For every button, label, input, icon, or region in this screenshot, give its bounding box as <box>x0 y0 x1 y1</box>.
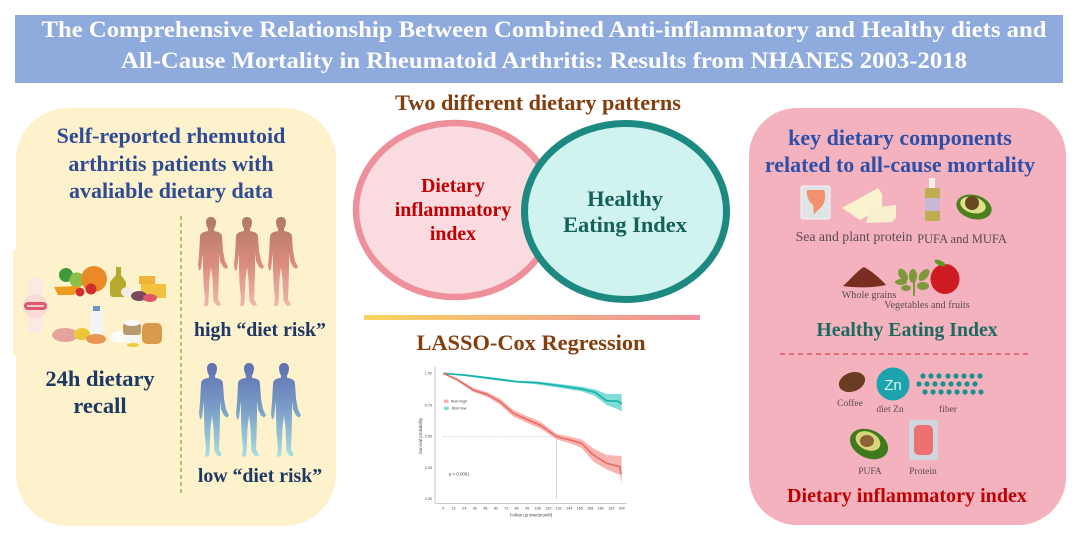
heading: LASSO-Cox Regression: LASSO-Cox Regression <box>416 330 646 355</box>
label: low diet risk: low “diet risk” <box>198 465 322 487</box>
chart: survival curves: 0.00 <box>425 497 432 501</box>
chart: survival curves: 96 <box>525 507 529 511</box>
chart: survival curves: 72 <box>504 507 508 511</box>
circle: healthy eating index <box>524 124 726 300</box>
panel heading: patients: Self-reported rhemutoid <box>57 123 285 148</box>
label: vegetables and fruits: Vegetables and fruits <box>884 300 970 311</box>
icon: oil bottle <box>925 178 940 221</box>
panel heading: key components <box>765 125 1035 177</box>
chart: survival curves: 192 <box>608 507 614 511</box>
label: 24h dietary recall: recall <box>73 393 127 418</box>
panel heading: patients: avaliable dietary data <box>69 178 273 203</box>
icon: meat, dairy and bread <box>52 306 162 347</box>
chart: survival curves: 204 <box>619 507 625 511</box>
label: 24h dietary recall: 24h dietary <box>45 366 155 391</box>
chart: survival curves: 168 <box>587 507 593 511</box>
label: PUFA and MUFA: PUFA and MUFA <box>917 232 1007 246</box>
circle: healthy eating index: Healthy <box>587 186 663 211</box>
chart: survival curves: 120 <box>545 507 551 511</box>
title banner: The Comprehensive Relationship Between Combined Anti-inflammatory and Healthy diets and <box>42 17 1046 43</box>
heading: dietary inflammatory index: Dietary inflammatory index <box>787 485 1027 507</box>
circle: dietary inflammatory index: Dietary <box>421 175 485 197</box>
icon: protein pack <box>909 420 938 460</box>
circle: healthy eating index: Eating Index <box>563 212 688 237</box>
label: fiber: fiber <box>939 404 958 415</box>
icon: tofu <box>842 188 896 223</box>
chart: survival curves: 12 <box>452 507 456 511</box>
title banner <box>15 15 1063 83</box>
figures: low diet risk <box>199 363 301 456</box>
divider bar <box>364 315 700 320</box>
chart: survival curves: 0 <box>442 507 444 511</box>
chart: survival curves: 144 <box>566 507 572 511</box>
icon: leaves <box>895 267 932 296</box>
figures: high diet risk <box>198 217 298 306</box>
heading: healthy eating index: Healthy Eating Index <box>816 319 998 341</box>
divider: dashed <box>780 353 1028 355</box>
panel heading: patients <box>57 123 285 203</box>
icon: coffee bean <box>836 368 868 396</box>
title banner: All-Cause Mortality in Rheumatoid Arthritis: Results from NHANES 2003-2018 <box>121 48 967 74</box>
chart: survival curves: Risk=low <box>452 407 467 411</box>
chart: survival curves: 60 <box>494 507 498 511</box>
chart: survival curves: 36 <box>473 507 477 511</box>
curve: high risk <box>443 373 621 474</box>
chart: survival curves: Risk=high <box>451 400 467 404</box>
chart: survival curves: p < 0.0001 <box>449 472 470 477</box>
chart: survival curves: Survival probability <box>418 417 423 454</box>
icon: salmon <box>801 186 830 219</box>
chart: survival curves: 108 <box>535 507 541 511</box>
curve: low risk <box>443 373 622 404</box>
label: coffee: Coffee <box>837 398 863 409</box>
panel: patients <box>13 108 336 526</box>
icon: knee joint <box>23 278 48 333</box>
circle: dietary inflammatory index: index <box>430 223 476 245</box>
chart: survival curves: 132 <box>556 507 562 511</box>
chart: survival curves: Follow up time(month) <box>510 512 553 517</box>
icon: avocado half <box>845 423 893 465</box>
icon: zinc <box>876 368 910 400</box>
icon: oil and protein foods <box>110 267 166 302</box>
chart: survival curves: 0.25 <box>425 466 432 470</box>
chart: survival curves: 0.50 <box>425 435 432 439</box>
confidence band: high risk <box>443 373 622 483</box>
icon: zinc: Zn <box>884 377 902 394</box>
panel heading: key components: related to all-cause mortality <box>765 152 1035 177</box>
icon: vegetables <box>54 266 107 296</box>
label: PUFA: PUFA <box>858 467 882 477</box>
chart: survival curves: 48 <box>483 507 487 511</box>
heading: two dietary patterns: Two different dietary patterns <box>395 90 681 115</box>
circle: dietary inflammatory index <box>356 123 554 297</box>
icon: avocado <box>954 191 994 223</box>
chart: survival curves: 84 <box>515 507 519 511</box>
divider: dashed <box>180 216 182 494</box>
panel: key dietary components <box>749 108 1066 525</box>
icon: whole grains <box>843 267 886 287</box>
chart: survival curves <box>418 367 627 517</box>
panel heading: patients: arthritis patients with <box>68 151 274 176</box>
circle: dietary inflammatory index: inflammatory <box>395 199 511 221</box>
confidence band: low risk <box>443 373 622 412</box>
label: diet Zn: diet Zn <box>876 405 904 415</box>
panel heading: key components: key dietary components <box>788 125 1012 150</box>
chart: survival curves: 24 <box>462 507 466 511</box>
chart: survival curves: 0.75 <box>425 403 432 407</box>
label: sea and plant protein: Sea and plant protein <box>796 229 913 244</box>
label: protein: Protein <box>909 467 937 477</box>
chart: survival curves: 1.00 <box>425 372 432 376</box>
chart: survival curves: 180 <box>598 507 604 511</box>
label: whole grains: Whole grains <box>842 290 896 301</box>
venn diagram <box>356 123 726 300</box>
icon: apple <box>930 258 960 294</box>
label: high diet risk: high “diet risk” <box>194 319 326 341</box>
icon: fiber <box>916 373 984 395</box>
label: 24h dietary recall <box>45 366 155 418</box>
chart: survival curves: 156 <box>577 507 583 511</box>
